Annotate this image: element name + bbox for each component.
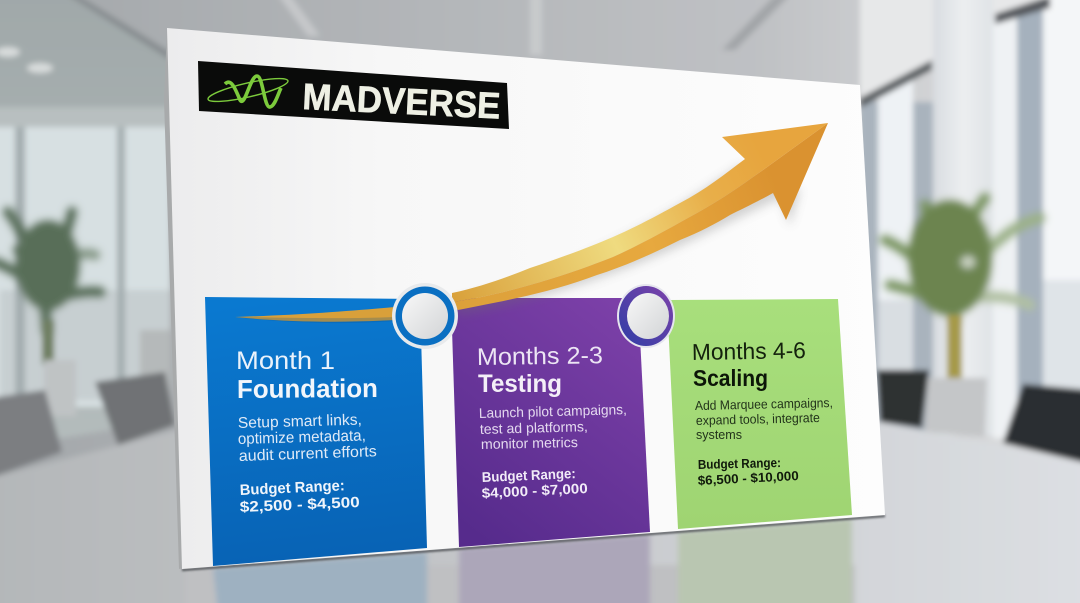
panel: months 4-6 scaling (667, 299, 852, 529)
plant: right (885, 198, 1040, 437)
description: systems (696, 427, 742, 442)
description (479, 401, 627, 452)
logo wordmark: MADVERSE (302, 76, 501, 127)
logo banner (198, 61, 509, 129)
description: test ad platforms, (480, 418, 588, 437)
panel: month 1 foundation (205, 297, 427, 566)
plant: left (0, 212, 100, 416)
chairs: right (877, 370, 1080, 464)
description: optimize metadata, (238, 427, 366, 448)
heading: foundation: Foundation (237, 373, 378, 404)
budget range: Budget Range: (481, 465, 576, 485)
heading: months 4-6: Months 4-6 (692, 337, 806, 365)
description: Setup smart links, (238, 412, 362, 432)
chairs: left (0, 372, 175, 478)
heading: testing: Testing (478, 370, 562, 398)
description: audit current efforts (239, 443, 377, 465)
heading: months 2-3: Months 2-3 (477, 342, 603, 371)
budget range: $6,500 - $10,000 (697, 468, 799, 488)
budget range: Budget Range: (239, 477, 345, 499)
description: expand tools, integrate (696, 410, 820, 428)
board shadow (182, 515, 885, 571)
right side: ceiling, windows, column (860, 0, 1080, 440)
budget range (239, 477, 360, 516)
panel: months 2-3 testing (451, 298, 650, 547)
arrow: growth (235, 123, 828, 323)
description (695, 395, 833, 442)
description: monitor metrics (481, 434, 578, 452)
milestone marker: blue (392, 283, 458, 349)
budget range: Budget Range: (698, 455, 781, 472)
description: Launch pilot campaigns, (479, 401, 627, 421)
board side edge (164, 28, 183, 569)
heading: scaling: Scaling (693, 365, 768, 391)
budget range (481, 465, 588, 501)
logo icon (206, 74, 290, 107)
budget range (697, 455, 799, 488)
presentation board (167, 28, 885, 569)
description: Add Marquee campaigns, (695, 395, 833, 413)
milestone marker: purple (617, 284, 675, 348)
heading: month 1: Month 1 (236, 347, 335, 375)
budget range: $4,000 - $7,000 (481, 480, 588, 501)
board reflection (185, 518, 855, 603)
description (238, 412, 377, 465)
ceiling beams (278, 0, 790, 55)
budget range: $2,500 - $4,500 (239, 494, 360, 516)
